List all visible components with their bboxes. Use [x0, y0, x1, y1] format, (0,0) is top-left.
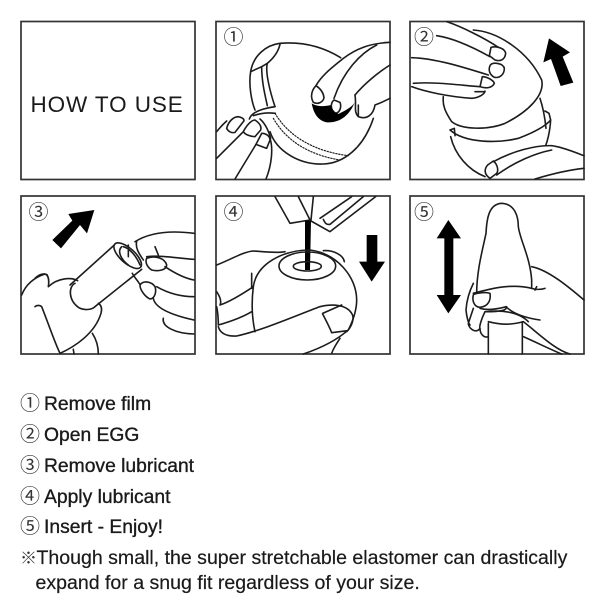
panel: step 1 remove film — [216, 21, 390, 180]
step 5 text: Insert - Enjoy! — [44, 517, 163, 538]
step 5 text: ⑤ — [20, 510, 40, 539]
panel: step 5 insert — [410, 196, 584, 354]
step number 5: ⑤ — [414, 196, 434, 225]
footnote: Though small, the super stretchable elastomer can drastically — [36, 547, 568, 569]
step number 1: ① — [224, 21, 244, 50]
panel: how to use title — [21, 22, 195, 180]
step number 2: ② — [414, 21, 434, 50]
illustration: opening egg — [412, 22, 584, 179]
step 4 text: Apply lubricant — [44, 487, 171, 508]
illustration: removing lubricant cap — [22, 232, 194, 354]
footnote — [20, 544, 568, 594]
step 3 text: Remove lubricant — [44, 456, 195, 477]
arrow: up right — [52, 210, 94, 248]
step number 3: ③ — [28, 196, 48, 225]
panel: step 2 open egg — [410, 21, 584, 180]
illustration: applying lubricant into egg — [217, 197, 376, 354]
step 4 text: ④ — [20, 480, 40, 509]
arrow: up and down — [437, 220, 461, 313]
step 2 text: Open EGG — [44, 425, 139, 446]
illustration: hand holding egg — [466, 203, 584, 354]
footnote: ※ — [20, 544, 37, 569]
arrow: down — [359, 235, 385, 282]
panel: step 4 apply lubricant — [216, 196, 390, 354]
arrow: up left — [543, 38, 573, 86]
step number 4: ④ — [224, 196, 244, 225]
panel: step 3 remove lubricant — [21, 196, 195, 354]
step 2 text: ② — [20, 418, 40, 447]
step 1 text: ① — [20, 387, 40, 416]
step 1 text: Remove film — [44, 394, 151, 415]
footnote: expand for a snug fit regardless of your size. — [36, 572, 420, 594]
instruction list — [20, 387, 195, 539]
title: HOW TO USE — [30, 92, 184, 117]
step 3 text: ③ — [20, 449, 40, 478]
illustration: peeling film off egg — [217, 42, 390, 179]
